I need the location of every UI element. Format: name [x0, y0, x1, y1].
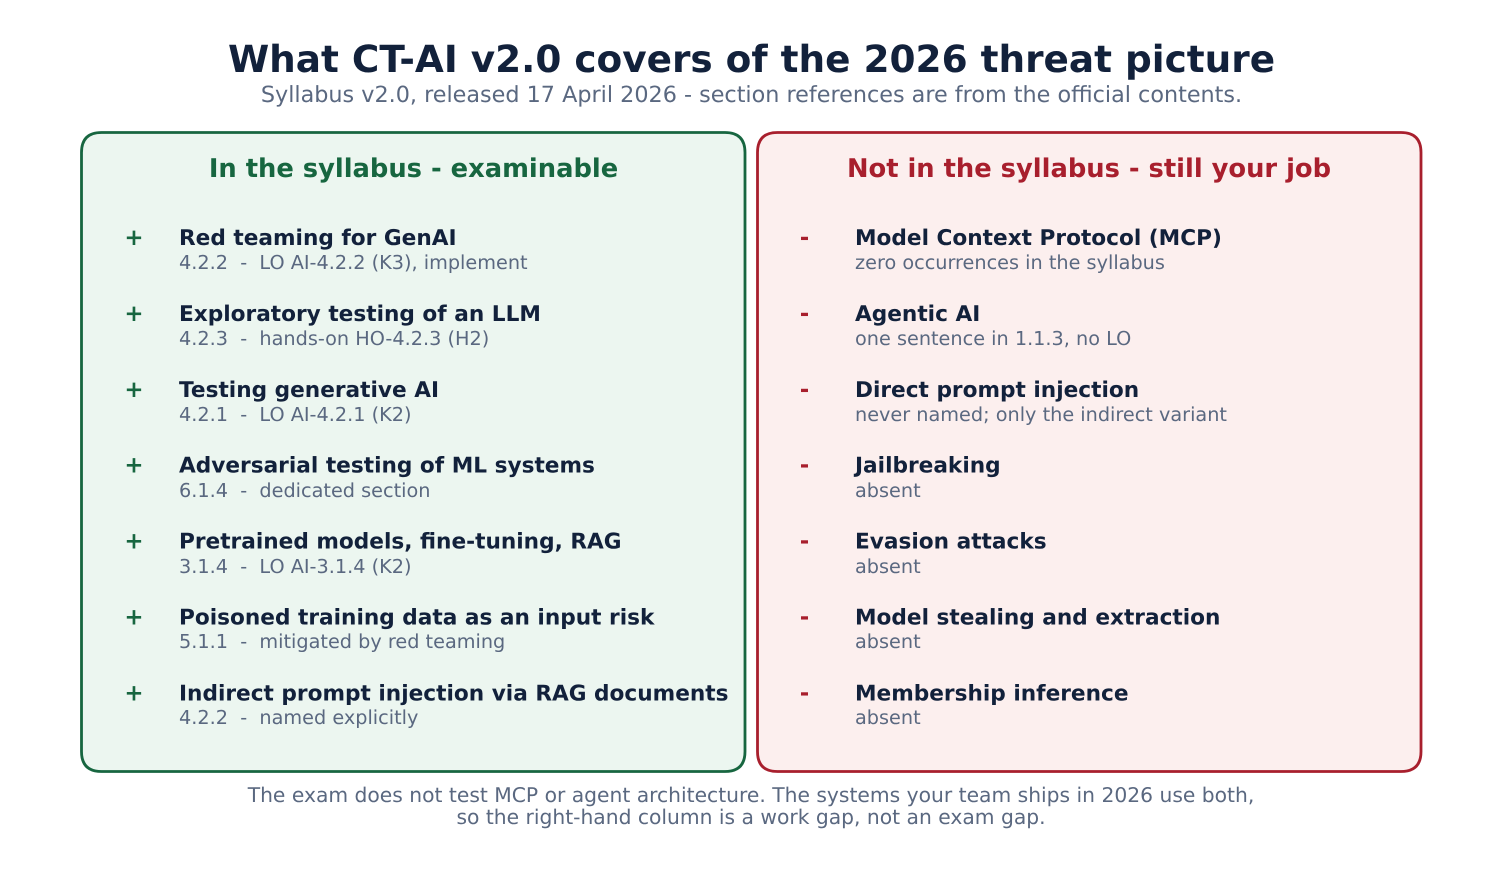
item: membership inference: absent	[855, 706, 921, 729]
item: adversarial testing: +	[124, 452, 144, 478]
item: MCP	[800, 225, 1222, 274]
item: direct prompt injection: never named; only the indirect variant	[855, 403, 1227, 426]
footer note: The exam does not test MCP or agent architecture. The systems your team ships in 2026 use both,	[247, 783, 1254, 807]
title: What CT-AI v2.0 covers of the 2026 threat picture	[228, 37, 1275, 81]
item: pretrained models: 3.1.4 - LO AI-3.1.4 (K2)	[179, 555, 412, 578]
item: poisoned training data: Poisoned training data as an input risk	[179, 606, 655, 630]
item: adversarial testing: Adversarial testing of ML systems	[179, 454, 595, 478]
item: agentic AI: Agentic AI	[855, 302, 980, 327]
panel: in the syllabus	[82, 132, 745, 772]
item: red teaming: 4.2.2 - LO AI-4.2.2 (K3), implement	[179, 251, 528, 274]
item: testing generative AI: +	[124, 377, 144, 403]
item: testing generative AI: Testing generative AI	[179, 378, 439, 403]
subtitle: Syllabus v2.0, released 17 April 2026 - section references are from the official contents.	[261, 82, 1242, 108]
item: jailbreaking: -	[800, 452, 809, 478]
item: direct prompt injection: Direct prompt injection	[855, 378, 1139, 403]
item: agentic AI: -	[800, 301, 809, 327]
item: poisoned training data: 5.1.1 - mitigated by red teaming	[179, 630, 505, 653]
item: red teaming: +	[124, 225, 144, 251]
item: testing generative AI	[124, 377, 439, 426]
item: MCP: zero occurrences in the syllabus	[855, 251, 1165, 274]
item: adversarial testing: 6.1.4 - dedicated section	[179, 479, 430, 502]
item: model stealing: -	[800, 604, 809, 630]
item: pretrained models: +	[124, 528, 144, 554]
item: agentic AI	[800, 301, 1131, 350]
item: indirect prompt injection: 4.2.2 - named explicitly	[179, 706, 418, 729]
item: membership inference: Membership inference	[855, 682, 1129, 706]
item: membership inference	[800, 680, 1129, 729]
item: direct prompt injection	[800, 377, 1227, 426]
item: poisoned training data	[124, 604, 655, 653]
item: evasion attacks: -	[800, 528, 809, 554]
item: poisoned training data: +	[124, 604, 144, 630]
item: jailbreaking	[800, 452, 1001, 502]
item: testing generative AI: 4.2.1 - LO AI-4.2.1 (K2)	[179, 403, 412, 426]
item: exploratory testing: Exploratory testing of an LLM	[179, 302, 541, 327]
item: agentic AI: one sentence in 1.1.3, no LO	[855, 327, 1131, 350]
item: MCP: Model Context Protocol (MCP)	[855, 226, 1222, 251]
item: MCP: -	[800, 225, 809, 251]
item: evasion attacks: Evasion attacks	[855, 530, 1047, 554]
item: evasion attacks: absent	[855, 555, 921, 578]
panel heading: examinable: In the syllabus - examinable	[209, 154, 618, 184]
footer note	[247, 783, 1254, 829]
item: jailbreaking: absent	[855, 479, 921, 502]
item: model stealing: absent	[855, 630, 921, 653]
item: adversarial testing	[124, 452, 595, 502]
item: red teaming: Red teaming for GenAI	[179, 226, 457, 251]
item: membership inference: -	[800, 680, 809, 706]
panel heading: still your job: Not in the syllabus - still your job	[847, 154, 1331, 184]
item: indirect prompt injection: Indirect prompt injection via RAG documents	[179, 682, 729, 706]
item: exploratory testing	[124, 301, 541, 350]
item: pretrained models	[124, 528, 622, 578]
item: exploratory testing: +	[124, 301, 144, 327]
item: model stealing: Model stealing and extraction	[855, 606, 1220, 630]
item: evasion attacks	[800, 528, 1047, 578]
item: model stealing	[800, 604, 1220, 653]
item: exploratory testing: 4.2.3 - hands-on HO-4.2.3 (H2)	[179, 327, 489, 350]
item: indirect prompt injection: +	[124, 680, 144, 706]
item: red teaming	[124, 225, 528, 274]
item: pretrained models: Pretrained models, fine-tuning, RAG	[179, 530, 622, 554]
item: direct prompt injection: -	[800, 377, 809, 403]
item: jailbreaking: Jailbreaking	[853, 454, 1001, 478]
panel: not in the syllabus	[758, 132, 1421, 772]
footer note: so the right-hand column is a work gap, not an exam gap.	[456, 805, 1046, 829]
item: indirect prompt injection	[124, 680, 729, 729]
